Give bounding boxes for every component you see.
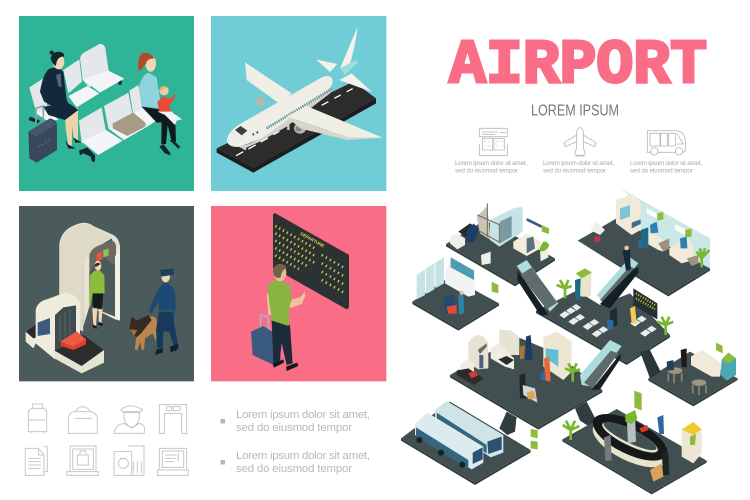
floor: buses: [401, 401, 538, 485]
seats: back row: [29, 44, 124, 123]
feature text: column 1: [455, 160, 527, 174]
icon: passport and ticket: [114, 446, 144, 475]
icon set: bottom left: [25, 404, 188, 475]
icon: laptop with bag: [67, 446, 98, 475]
escalator right with passenger: [597, 246, 638, 308]
bullet text 2: [220, 450, 370, 475]
traveller's suitcase: [251, 315, 281, 364]
icon: bus: [647, 131, 685, 155]
feature text: column 3: sed do eiusmod tempor: [630, 168, 693, 174]
baggage scanner: [26, 293, 104, 373]
panel: security check: [19, 206, 194, 381]
bullet text 1: sed do eiusmod tempor: [236, 422, 352, 434]
floor: check-in desks: [578, 188, 710, 296]
title: AIRPORT: [449, 30, 707, 101]
feature text: column 2: Lorem ipsum dolor sit amet,: [543, 160, 614, 167]
traveller: [267, 264, 305, 371]
icon: document: [25, 447, 47, 475]
floor: baggage claim: [562, 385, 707, 494]
seated woman in suit: [40, 51, 82, 149]
bullet text 2: Lorem ipsum dolor sit amet,: [236, 450, 370, 462]
bullet text 2: sed do eiusmod tempor: [236, 463, 352, 475]
panel: waiting area: [19, 16, 194, 191]
woman in the scanner: [89, 261, 105, 329]
departure board: DEPARTURE: [300, 231, 325, 248]
feature text: column 3: Lorem ipsum dolor sit amet,: [630, 160, 702, 167]
feature text: column 2: sed do eiusmod tempor: [543, 168, 606, 174]
icon: pilot: [114, 406, 145, 433]
floor: security hall: [450, 330, 602, 430]
subtitle: LOREM IPSUM: [531, 102, 619, 120]
icon: trolley bag: [28, 404, 47, 434]
suitcase: [28, 106, 57, 163]
stairs to baggage hall: [575, 402, 596, 426]
icon: laptop with booking: [157, 448, 188, 475]
floor: staff room and lounge: [446, 203, 555, 286]
icon: handbag: [68, 407, 97, 433]
bullet text 1: [220, 409, 370, 434]
police officer: [149, 269, 178, 355]
icon: seats and screen: [479, 128, 507, 156]
security arch: [59, 223, 120, 340]
isometric airport scene: upper floors: [412, 188, 710, 365]
icon: metal detector: [159, 405, 187, 433]
waiting hall seats: [559, 304, 657, 337]
escalator lower: [580, 340, 622, 390]
feature text: column 3: [630, 160, 702, 174]
feature text: column 1: Lorem ipsum dolor sit amet,: [455, 160, 527, 167]
floor: central waiting hall: [536, 268, 673, 365]
guard dog: [129, 315, 157, 351]
escalator left: [517, 260, 558, 315]
isometric airport scene: lower floors: [401, 330, 738, 494]
departure board: [273, 213, 349, 309]
floor: cafe: [640, 336, 738, 406]
bullet text 1: Lorem ipsum dolor sit amet,: [236, 409, 370, 421]
floor: restroom: [412, 257, 499, 331]
baggage carousel: [586, 405, 674, 477]
runway: [217, 82, 376, 173]
icon: plane: [564, 127, 596, 156]
stairs: [499, 412, 517, 435]
airplane: [227, 27, 383, 150]
seats: front row: [79, 85, 157, 162]
panel: departure board: [211, 206, 386, 381]
woman with child: [138, 53, 182, 155]
panel: airplane: [211, 16, 386, 191]
feature text: column 2: [543, 160, 614, 174]
briefcase: [113, 113, 145, 136]
feature text: column 1: sed do eiusmod tempor: [455, 168, 518, 174]
